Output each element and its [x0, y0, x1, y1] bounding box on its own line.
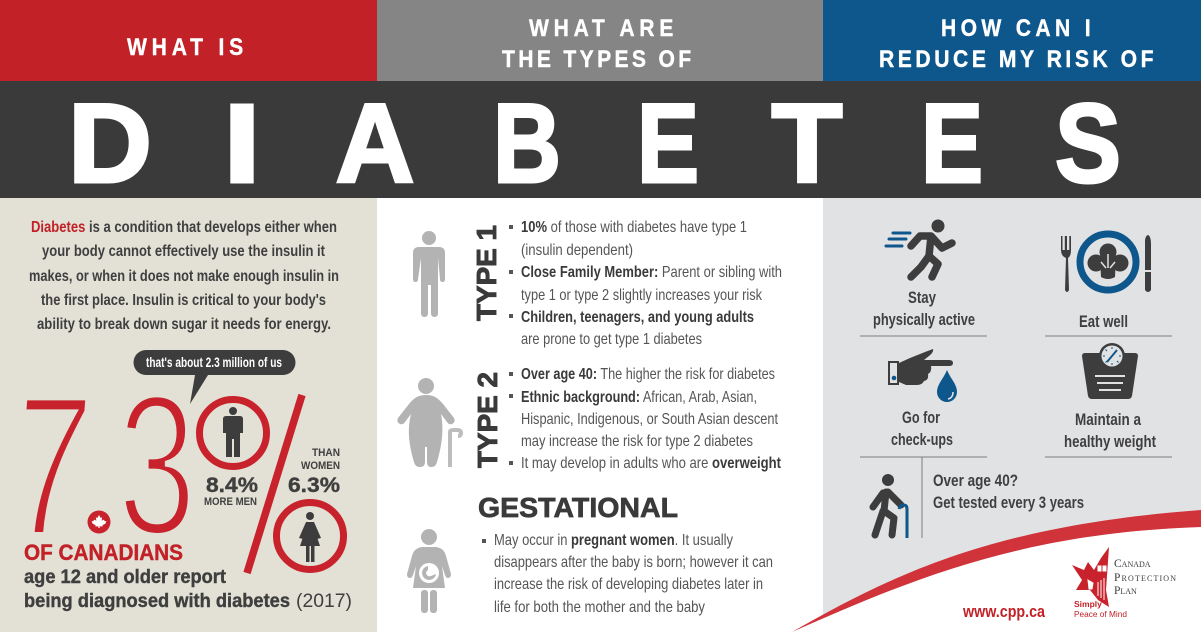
- label: stay physically active: [873, 289, 975, 329]
- logo: Canada Protection Plan: Plan: [1114, 585, 1137, 597]
- icon: hand and blood drop: [889, 349, 957, 402]
- type 2 bullet list: Ethnic background: African, Arab, Asian,: [521, 389, 757, 406]
- type 2 bullet list: Over age 40: The higher the risk for diabetes: [521, 366, 775, 383]
- header: what are the types of: [377, 0, 823, 81]
- big statistic 7.3: [5, 354, 196, 578]
- logo: Canada Protection Plan: Protection: [1114, 572, 1176, 584]
- statistic caption: (2017): [296, 591, 352, 612]
- logo: Canada Protection Plan: Simply: [1074, 599, 1102, 609]
- big statistic 7.3: 3: [118, 354, 196, 577]
- logo: Canada Protection Plan: [1072, 547, 1176, 619]
- header: what is: [0, 0, 377, 81]
- gestational bullet text: May occur in pregnant women. It usually: [494, 532, 733, 549]
- type 1 bullet list: are prone to get type 1 diabetes: [521, 331, 702, 348]
- label: maintain a healthy weight: Maintain a: [1075, 411, 1142, 429]
- definition paragraph: makes, or when it does not make enough insulin in: [29, 268, 339, 285]
- type 1 bullet list: Close Family Member: Parent or sibling with: [521, 264, 782, 281]
- panel: types of diabetes: [397, 219, 782, 616]
- type 1 bullet list: Children, teenagers, and young adults: [521, 309, 754, 326]
- women statistic: 6.3%: [288, 474, 340, 497]
- header: what are the types of: WHAT ARE: [529, 15, 673, 41]
- men statistic: 8.4%: [206, 474, 258, 497]
- label: go for check-ups: [891, 409, 953, 449]
- heading: gestational: GESTATIONAL: [478, 492, 678, 523]
- type 1 bullet list: (insulin dependent): [521, 242, 633, 259]
- speech bubble: that's about 2.3 million of us: [146, 355, 282, 370]
- type 2 bullet list: It may develop in adults who are overweight: [521, 455, 782, 472]
- women statistic: WOMEN: [301, 460, 340, 472]
- label: maintain a healthy weight: healthy weight: [1064, 433, 1156, 451]
- gestational bullet text: disappears after the baby is born; however it can: [494, 554, 773, 571]
- header: how can I reduce my risk of: REDUCE MY RISK OF: [879, 46, 1154, 72]
- gestational bullet text: increase the risk of developing diabetes later in: [494, 576, 763, 593]
- statistic caption: [24, 540, 352, 612]
- panel: reduce your risk: [860, 220, 1172, 538]
- icon: person type 1: [413, 231, 445, 317]
- type 2 bullet list: [509, 366, 782, 472]
- percent sign with men and women icons: [200, 395, 344, 573]
- panel: what is diabetes: [5, 219, 352, 612]
- women statistic: [288, 447, 340, 497]
- definition paragraph: your body cannot effectively use the insulin it: [42, 243, 326, 260]
- website address: www.cpp.ca: [962, 602, 1045, 621]
- statistic caption: being diagnosed with diabetes: [24, 591, 290, 612]
- statistic caption: OF CANADIANS: [24, 540, 183, 565]
- men circle: [200, 400, 266, 466]
- note: over age 40: Get tested every 3 years: [933, 494, 1084, 512]
- women circle: [276, 502, 344, 570]
- speech bubble: [133, 350, 296, 404]
- men statistic: [204, 474, 258, 508]
- statistic caption: age 12 and older report: [24, 567, 227, 588]
- icon: older person with cane: [873, 474, 907, 538]
- label: maintain a healthy weight: [1064, 411, 1156, 451]
- title band: DIABETES: B: [493, 81, 561, 206]
- label: stay physically active: Stay: [908, 289, 937, 307]
- big statistic 7.3: 7: [5, 355, 98, 578]
- logo: Canada Protection Plan: Canada: [1114, 558, 1151, 570]
- title band: DIABETES: [0, 81, 1201, 206]
- title band: DIABETES: E: [921, 81, 983, 206]
- type 1 bullet list: type 1 or type 2 slightly increases your risk: [521, 287, 763, 304]
- title band: DIABETES: A: [336, 81, 414, 206]
- icon: pregnant woman: [407, 529, 451, 613]
- definition paragraph: the first place. Insulin is critical to your body's: [41, 292, 326, 309]
- type 1 bullet list: 10% of those with diabetes have type 1: [521, 219, 747, 236]
- heading: type 2: TYPE 2: [472, 372, 503, 468]
- type 1 bullet list: [509, 219, 782, 348]
- gestational bullet text: life for both the mother and the baby: [494, 599, 705, 616]
- icon: weighing scale: [1082, 343, 1138, 399]
- definition paragraph: ability to break down sugar it needs for energy.: [37, 316, 331, 333]
- heading: type 1: TYPE 1: [471, 225, 502, 321]
- type 2 bullet list: may increase the risk for type 2 diabetes: [521, 433, 753, 450]
- header: what is: WHAT IS: [127, 34, 243, 60]
- note: over age 40: Over age 40?: [933, 472, 1018, 490]
- footer swoosh: [792, 510, 1201, 632]
- header: how can I reduce my risk of: [823, 0, 1201, 81]
- note: over age 40: [933, 472, 1084, 512]
- women statistic: THAN: [312, 447, 340, 459]
- definition paragraph: [29, 219, 339, 333]
- icon: fork, plate and knife: [1061, 234, 1151, 292]
- label: eat well: Eat well: [1079, 313, 1128, 331]
- title band: DIABETES: D: [68, 81, 152, 206]
- background panels: [0, 198, 1201, 632]
- label: go for check-ups: Go for: [902, 409, 940, 427]
- label: go for check-ups: check-ups: [891, 431, 953, 449]
- header: what are the types of: THE TYPES OF: [502, 46, 691, 72]
- title band: DIABETES: E: [637, 81, 699, 206]
- logo: Canada Protection Plan: Peace of Mind: [1074, 609, 1127, 619]
- title band: DIABETES: T: [772, 81, 842, 206]
- title band: DIABETES: S: [1055, 81, 1121, 206]
- men statistic: MORE MEN: [204, 496, 257, 508]
- label: stay physically active: physically active: [873, 311, 975, 329]
- type 2 bullet list: Hispanic, Indigenous, or South Asian descent: [521, 411, 778, 428]
- gestational bullet text: [482, 532, 773, 616]
- icon: runner: [886, 220, 952, 277]
- title band: DIABETES: I: [223, 81, 261, 206]
- definition paragraph: Diabetes is a condition that develops either when: [31, 219, 337, 236]
- header: how can I reduce my risk of: HOW CAN I: [941, 15, 1091, 41]
- icon: older overweight person with cane: [397, 378, 461, 467]
